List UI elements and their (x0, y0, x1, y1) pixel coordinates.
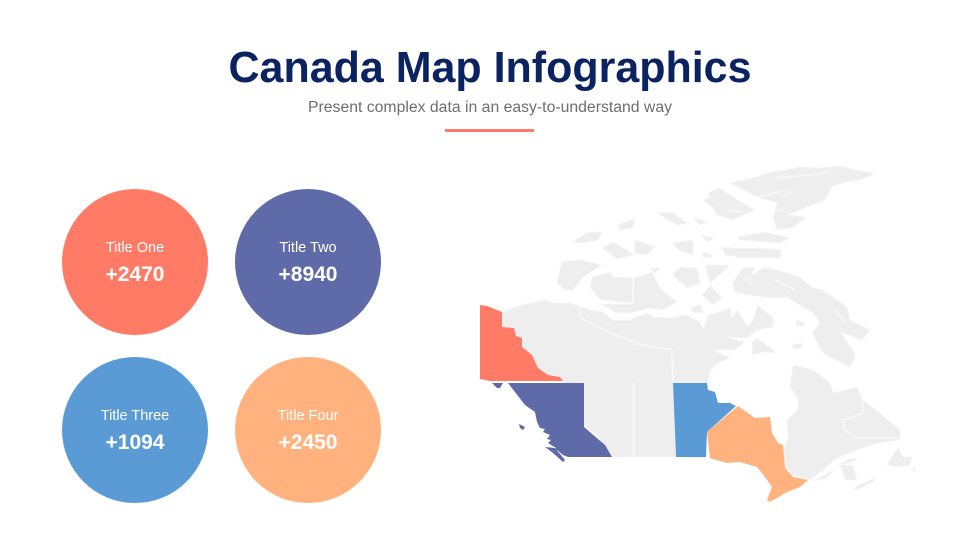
circle: title three: +1094 (106, 431, 165, 454)
title: Canada Map Infographics (228, 43, 752, 92)
circle: title three: Title Three (101, 408, 169, 424)
map: white channels and borders (580, 172, 900, 438)
circle: title three (62, 357, 208, 503)
circle: title two: +8940 (279, 263, 337, 286)
circle: title four: +2450 (279, 431, 337, 454)
circle: title two: Title Two (279, 240, 337, 256)
map: Alberta (584, 383, 633, 457)
map of Canada (480, 166, 916, 502)
map: Saskatchewan (634, 383, 676, 457)
circle: title one: Title One (106, 240, 164, 256)
map: unhighlighted territories and islands (502, 166, 916, 490)
map: Manitoba (673, 383, 736, 457)
circle: title one: +2470 (106, 263, 164, 286)
subtitle: Present complex data in an easy-to-understand way (308, 99, 672, 116)
map: British Columbia (492, 383, 612, 462)
map: Ontario (707, 406, 808, 502)
circle: title two (235, 189, 381, 335)
map: Yukon (480, 305, 563, 381)
circle: title four (235, 357, 381, 503)
circle: title one (62, 189, 208, 335)
title underline (445, 129, 534, 132)
circle: title four: Title Four (278, 408, 339, 424)
